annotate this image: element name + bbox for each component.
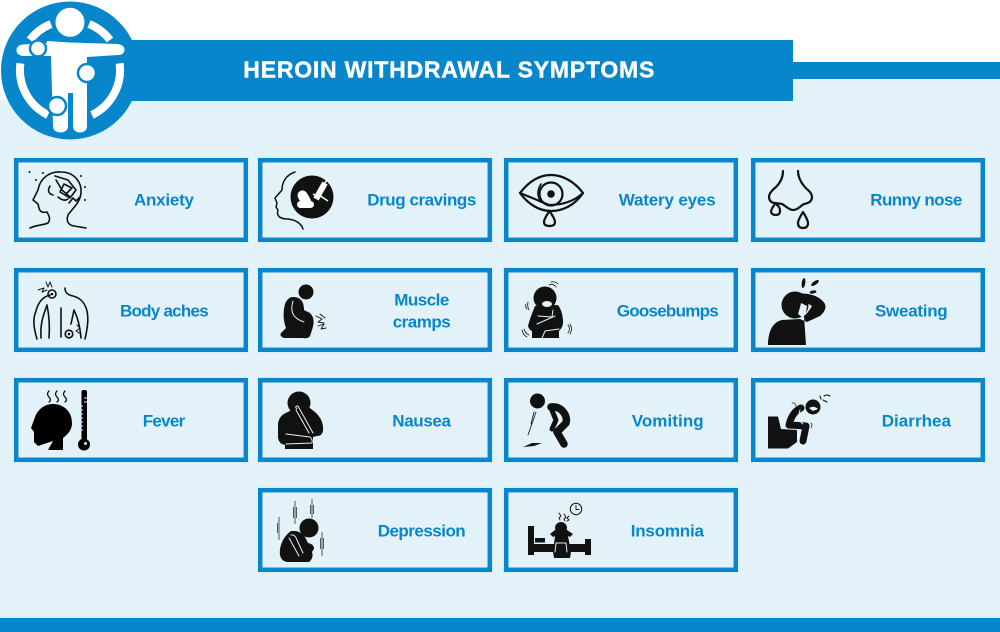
card: Watery eyes [506, 160, 736, 240]
card: Runny nose [753, 160, 983, 240]
icon: figure on toilet [768, 395, 830, 448]
card: Anxiety [16, 160, 246, 240]
card: Diarrhea [753, 380, 983, 460]
label [393, 291, 451, 332]
card: Depression [260, 490, 490, 570]
icon: figure holding mouth [278, 392, 323, 449]
label: Drug cravings [367, 191, 476, 210]
icon: eye with tear [520, 175, 583, 226]
icon: anxious head [28, 171, 86, 228]
label: Goosebumps [617, 302, 719, 321]
label: Diarrhea [882, 412, 952, 431]
icon: shivering figure [522, 282, 572, 338]
icon: figure wiping sweat [768, 278, 825, 345]
label: Depression [378, 522, 466, 541]
card: Muscle cramps [260, 270, 490, 350]
icon: figure on bed with clock [528, 503, 591, 558]
label: cramps [393, 313, 451, 332]
label: Fever [143, 412, 186, 431]
label: Runny nose [870, 191, 962, 210]
icon: nose with drops [769, 171, 812, 228]
icon: hot head and thermometer [31, 390, 90, 450]
icon: back with pain points [34, 282, 88, 339]
header banner [130, 40, 1000, 101]
label: Muscle [394, 291, 449, 310]
icon: figure vomiting [523, 394, 566, 447]
label: Insomnia [631, 522, 705, 541]
card: Fever [16, 380, 246, 460]
label: Sweating [875, 302, 948, 321]
card: Vomiting [506, 380, 736, 460]
icon: head with pills and syringe [275, 172, 334, 229]
card: Drug cravings [260, 160, 490, 240]
title: HEROIN WITHDRAWAL SYMPTOMS [243, 56, 654, 82]
label: Body aches [120, 302, 209, 321]
card: Insomnia [506, 490, 736, 570]
label: Nausea [392, 412, 452, 431]
label: Watery eyes [619, 191, 716, 210]
card: Sweating [753, 270, 983, 350]
card: Nausea [260, 380, 490, 460]
icon: body with pain points [1, 2, 139, 140]
label: Anxiety [134, 191, 195, 210]
footer bar [0, 618, 1000, 632]
card: Body aches [16, 270, 246, 350]
card: Goosebumps [506, 270, 736, 350]
label: Vomiting [632, 412, 704, 431]
icon: kneeling figure with cramp [280, 284, 326, 338]
icon: huddled figure with rain [278, 499, 324, 562]
